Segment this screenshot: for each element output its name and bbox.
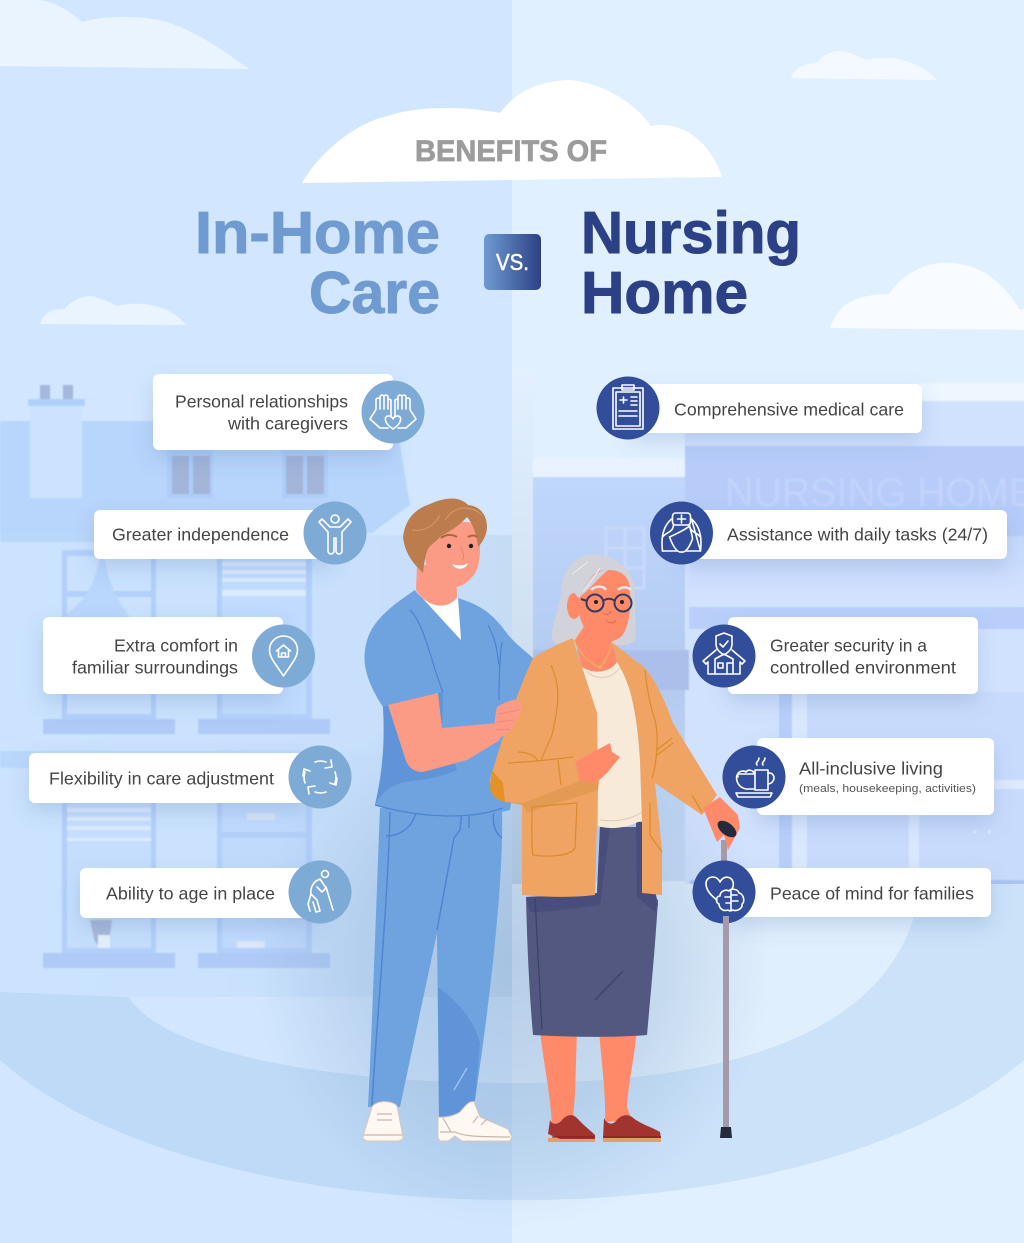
cardigan <box>490 638 598 897</box>
background: ground <box>0 690 1024 1230</box>
heading: in-home care: Care <box>309 260 440 326</box>
card: peace of mind: Peace of mind for families <box>770 884 974 904</box>
card: extra comfort: familiar surroundings <box>72 658 238 678</box>
trousers <box>368 808 502 1117</box>
heading: nursing home: Home <box>581 260 748 326</box>
front hand <box>575 743 620 782</box>
neck and face <box>575 625 617 672</box>
panel: nursing home benefits <box>596 376 1007 924</box>
glasses <box>581 594 632 612</box>
arm <box>388 693 500 772</box>
necklace <box>574 640 612 667</box>
background: nursing home building <box>505 370 1024 900</box>
heading: nursing home <box>581 200 801 326</box>
card: age in place <box>80 860 352 924</box>
face <box>424 522 480 587</box>
skirt <box>526 827 658 1037</box>
card: security: Greater security in a <box>770 636 927 656</box>
card: daily tasks <box>650 502 1007 564</box>
heading: nursing home: Nursing <box>581 200 801 266</box>
card: all-inclusive: (meals, housekeeping, activities) <box>799 783 976 795</box>
illustration: nurse <box>363 498 535 1141</box>
card: greater independence <box>94 502 366 564</box>
heading: in-home care <box>195 200 440 326</box>
card: flexibility: Flexibility in care adjustment <box>49 768 274 788</box>
shoes <box>548 1136 661 1142</box>
cane upper shaft between hand and icon <box>721 840 727 864</box>
hair <box>552 554 636 645</box>
illustration: nurse hand on cardigan <box>495 699 522 738</box>
shirt <box>364 590 535 816</box>
neck <box>416 565 457 606</box>
card: security <box>692 617 978 694</box>
card: all-inclusive <box>722 738 994 815</box>
card: extra comfort <box>43 617 315 694</box>
card: security: controlled environment <box>770 658 956 678</box>
card: personal relationships <box>153 374 424 450</box>
badge: vs: VS. <box>496 249 529 275</box>
heading: in-home care: In-Home <box>195 200 440 266</box>
legs <box>540 1030 577 1125</box>
shoes <box>363 1102 403 1141</box>
card: personal relationships: with caregivers <box>227 414 348 434</box>
badge: vs <box>484 234 541 290</box>
eyes and smile <box>447 544 451 548</box>
cream top <box>582 662 642 828</box>
card: medical care: Comprehensive medical care <box>674 400 904 420</box>
card: flexibility <box>29 746 352 808</box>
clouds <box>0 0 1024 330</box>
card: medical care <box>596 376 922 440</box>
card: personal relationships: Personal relationships <box>175 392 348 412</box>
card: age in place: Ability to age in place <box>106 884 275 904</box>
card: extra comfort: Extra comfort in <box>114 636 238 656</box>
card: daily tasks: Assistance with daily tasks (24/7) <box>727 524 988 544</box>
illustration: elderly woman <box>490 554 740 1142</box>
background: in-home house facade <box>0 385 520 997</box>
card: peace of mind <box>692 860 991 924</box>
cane <box>723 916 729 1128</box>
undershirt <box>415 590 461 640</box>
card: all-inclusive: All-inclusive living <box>799 758 943 778</box>
hair <box>403 498 487 573</box>
title: benefits of: BENEFITS OF <box>415 135 607 168</box>
panel: in-home care benefits <box>29 374 424 924</box>
card: greater independence: Greater independence <box>112 524 289 544</box>
cane hand <box>703 797 740 850</box>
